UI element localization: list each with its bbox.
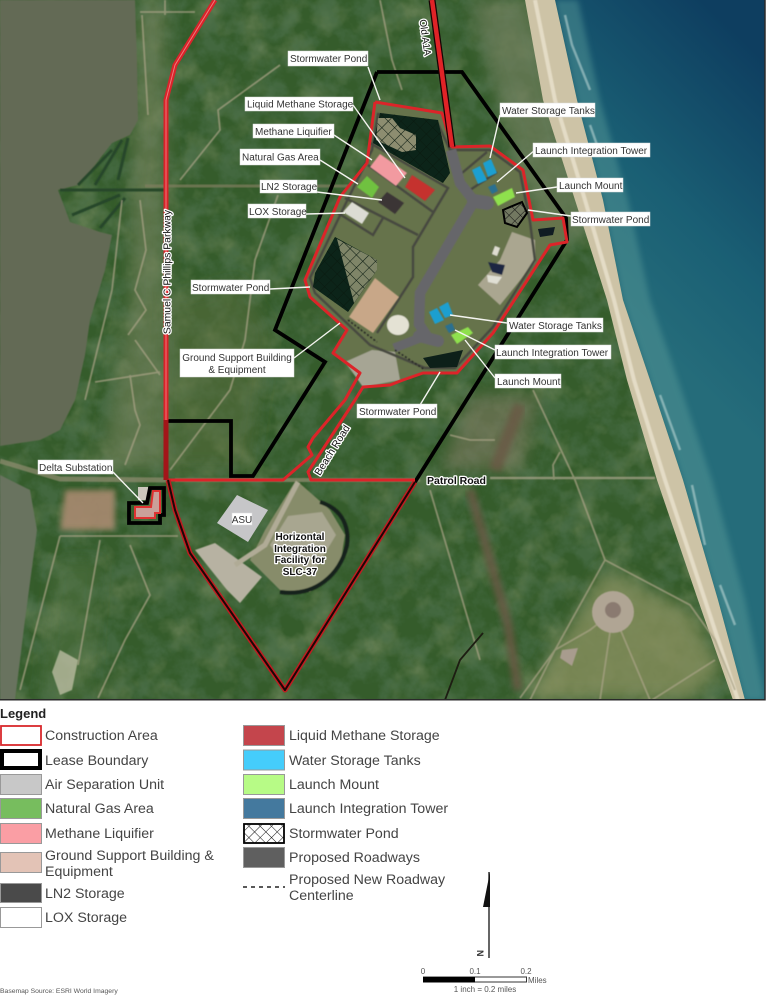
legend: air separation unit <box>0 774 164 794</box>
label: launch integration tower south: Launch Integration Tower <box>496 348 609 359</box>
legend: construction area <box>1 726 158 745</box>
legend: proposed roadways: Proposed Roadways <box>289 850 420 866</box>
legend: LN2 storage: LN2 Storage <box>45 886 125 902</box>
label: water storage tanks south: Water Storage Tanks <box>509 321 602 332</box>
launch complex site ground <box>305 102 567 387</box>
legend: stormwater pond: Stormwater Pond <box>289 826 399 842</box>
scale bar <box>421 967 547 994</box>
white sand clump <box>52 650 78 695</box>
legend: ground support building: Ground Support Building & <box>45 848 214 864</box>
label: stormwater pond north: Stormwater Pond <box>290 54 367 65</box>
legend: launch mount <box>244 774 379 794</box>
LOX storage <box>343 202 369 224</box>
label: LOX storage: LOX Storage <box>249 207 307 218</box>
circular clearing <box>560 591 634 666</box>
legend: ground support building: Equipment <box>45 864 113 880</box>
pond: east hatched <box>503 202 527 227</box>
pink cleared site by substation <box>60 490 115 530</box>
facility pads <box>343 154 515 344</box>
label: LN2 storage: LN2 Storage <box>261 182 318 193</box>
legend title: Legend <box>0 706 46 721</box>
proposed roadways <box>310 114 535 370</box>
label: water storage tanks north: Water Storage Tanks <box>502 106 595 117</box>
legend: construction area: Construction Area <box>45 728 158 744</box>
label: liquid methane storage: Liquid Methane Storage <box>247 100 354 110</box>
label: methane liquifier: Methane Liquifier <box>255 127 332 138</box>
pond: south <box>423 350 463 368</box>
legend: water storage tanks <box>244 750 421 770</box>
substation <box>129 487 164 523</box>
LN2 storage <box>378 192 404 214</box>
launch mounts <box>493 188 515 206</box>
lighter scrub and grass zones <box>40 0 722 700</box>
legend: lease boundary <box>2 751 149 769</box>
north arrow <box>475 872 490 958</box>
methane liquifier <box>370 154 407 186</box>
legend <box>0 706 448 928</box>
scale bar: 0.1 <box>469 967 481 976</box>
legend: proposed new roadway centerline <box>243 872 446 904</box>
water tanks south <box>429 308 444 324</box>
satellite map <box>0 0 765 700</box>
launch integration towers <box>488 184 498 194</box>
legend: ground support building <box>0 848 214 880</box>
ocean and beach <box>525 0 765 700</box>
scale bar: Miles <box>528 976 547 985</box>
water tanks north <box>472 166 487 184</box>
legend: air separation unit: Air Separation Unit <box>45 777 164 793</box>
land base imagery <box>0 0 765 700</box>
scale bar: 1 inch = 0.2 miles <box>454 985 516 994</box>
trench <box>445 633 483 700</box>
lease boundary <box>168 72 567 482</box>
label: launch integration tower north: Launch Integration Tower <box>535 146 648 157</box>
construction area <box>166 0 567 690</box>
legend: natural gas area <box>0 798 154 818</box>
legend: stormwater pond <box>244 824 399 843</box>
label: stormwater pond east: Stormwater Pond <box>572 215 649 226</box>
ground support building <box>349 278 399 333</box>
legend: launch mount: Launch Mount <box>289 777 379 793</box>
legend: LOX storage <box>0 908 127 928</box>
legend: proposed roadways <box>244 848 420 868</box>
legend: natural gas area: Natural Gas Area <box>45 801 154 817</box>
natural gas area <box>357 176 379 198</box>
scale bar: 0.2 <box>520 967 532 976</box>
legend: proposed new roadway centerline: Proposed New Roadway <box>289 872 446 888</box>
legend: proposed new roadway centerline: Centerline <box>289 888 354 904</box>
road label: Samuel C Phillips Parkway: Samuel C Phillips Parkway <box>162 209 174 334</box>
lagoon water <box>0 0 165 700</box>
label: horizontal integration facility: Integration <box>274 544 326 555</box>
legend: methane liquifier: Methane Liquifier <box>45 826 154 842</box>
pond: west <box>313 237 377 312</box>
pond: north <box>373 113 450 183</box>
legend: liquid methane storage: Liquid Methane Storage <box>289 728 440 744</box>
legend: LN2 storage <box>0 884 125 902</box>
basemap source: Basemap Source: ESRI World Imagery <box>0 988 118 995</box>
label: stormwater pond west: Stormwater Pond <box>192 283 269 294</box>
label: natural gas area: Natural Gas Area <box>242 152 319 164</box>
legend: LOX storage: LOX Storage <box>45 910 127 926</box>
label: ground support building: Ground Support Building <box>182 353 292 364</box>
road label: Patrol Road: Patrol Road <box>427 475 486 487</box>
leader lines <box>113 67 571 503</box>
label: ASU: ASU <box>232 515 252 526</box>
legend: lease boundary: Lease Boundary <box>45 753 149 769</box>
legend: water storage tanks: Water Storage Tanks <box>289 753 421 769</box>
label: horizontal integration facility: Facility for <box>275 555 325 566</box>
legend: launch integration tower: Launch Integration Tower <box>289 801 448 817</box>
label: launch mount south: Launch Mount <box>497 377 561 388</box>
label: launch mount north: Launch Mount <box>559 181 623 192</box>
label: stormwater pond south: Stormwater Pond <box>359 407 436 418</box>
label: horizontal integration facility: SLC-37 <box>283 567 318 578</box>
label: delta substation: Delta Substation <box>39 463 112 474</box>
map edge lines <box>0 0 765 700</box>
north arrow: N <box>475 950 485 956</box>
horizontal integration facility grounds <box>195 480 347 603</box>
label: horizontal integration facility <box>274 532 326 578</box>
legend: launch integration tower <box>244 798 448 818</box>
dirt roads and clearings <box>0 0 735 700</box>
road label: Beach Road: Beach Road <box>313 423 353 478</box>
liquid methane storage <box>405 175 435 201</box>
road label: Old A1A: Old A1A <box>416 19 433 57</box>
brown dead vegetation strips <box>470 405 520 690</box>
scale bar: 0 <box>421 967 426 976</box>
pond: small east <box>538 227 555 237</box>
label: natural gas area <box>240 149 320 165</box>
legend: liquid methane storage <box>244 726 440 746</box>
label: horizontal integration facility: Horizontal <box>276 532 325 543</box>
legend: methane liquifier <box>0 824 154 844</box>
stormwater ponds <box>313 113 555 368</box>
label: ground support building <box>180 349 294 377</box>
label: ground support building: & Equipment <box>208 365 266 376</box>
ASU pad <box>217 495 268 542</box>
